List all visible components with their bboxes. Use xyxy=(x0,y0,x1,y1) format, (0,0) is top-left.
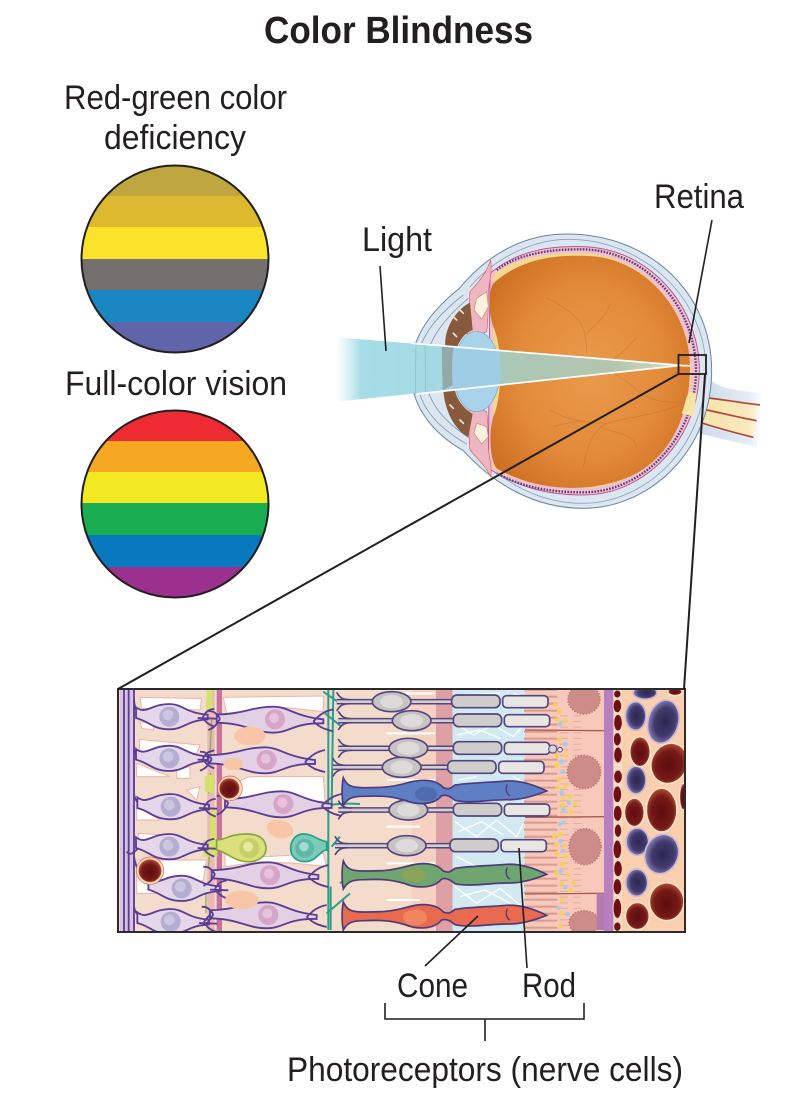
label: Light: Light xyxy=(362,221,433,259)
zoom line left xyxy=(118,374,678,689)
choroid and retina layers xyxy=(488,247,699,495)
peach nuclei xyxy=(223,727,295,909)
cone cell: green xyxy=(342,861,547,889)
circle: full-color vision bands xyxy=(80,409,270,599)
inner retinal layers xyxy=(120,690,360,934)
purple ganglion cells xyxy=(136,704,228,934)
title: Color Blindness xyxy=(264,10,533,52)
nerve fiber bars xyxy=(120,690,138,931)
heading: red-green color deficiency: deficiency xyxy=(104,119,246,157)
eye cross-section xyxy=(337,234,763,508)
arrow: Retina leader line xyxy=(689,220,712,343)
vertical strips xyxy=(202,690,222,931)
bracket xyxy=(385,1003,584,1041)
vitreous body xyxy=(490,256,690,488)
arrow: Rod leader line xyxy=(519,848,527,968)
circle: red-green color deficiency bands xyxy=(80,164,270,354)
teal vertical process xyxy=(323,690,360,930)
label: Photoreceptors: Photoreceptors (nerve cells) xyxy=(287,1051,683,1089)
yellow-green cell xyxy=(217,834,266,862)
teal cell xyxy=(291,834,327,862)
retina cross-section panel xyxy=(118,685,694,935)
pigment epithelium xyxy=(524,685,605,935)
cornea lines xyxy=(416,295,470,444)
zoom line right xyxy=(684,374,705,689)
sclera xyxy=(411,234,712,508)
label: Rod: Rod xyxy=(522,967,576,1005)
capillary zone xyxy=(622,690,685,932)
rod cells xyxy=(333,692,562,856)
purple Bruch band xyxy=(604,690,613,932)
arrow: Cone leader line xyxy=(425,916,478,966)
heading: red-green color deficiency: Red-green color xyxy=(64,79,287,117)
heading: red-green color deficiency xyxy=(64,79,287,157)
capillary chain xyxy=(613,690,622,931)
magnifier box on retina xyxy=(678,355,706,374)
label: Cone: Cone xyxy=(397,967,468,1005)
lens xyxy=(453,332,500,412)
heading: full-color vision: Full-color vision xyxy=(65,365,287,403)
panel frame xyxy=(118,689,685,932)
cone cell: blue xyxy=(342,778,547,806)
cone cell: red xyxy=(342,902,547,930)
outer plexiform band xyxy=(387,690,453,932)
pink bipolar cells xyxy=(200,707,342,928)
outer retinal layers xyxy=(333,685,694,935)
pigment granules xyxy=(552,703,577,928)
blood cells xyxy=(624,690,684,930)
optic disc xyxy=(682,392,697,417)
light-blue matrix xyxy=(453,690,527,932)
red blood cells xyxy=(136,776,242,884)
optic nerve xyxy=(683,377,763,447)
light beam xyxy=(337,337,690,402)
label: Retina: Retina xyxy=(654,178,744,216)
iris xyxy=(443,303,473,437)
arrow: Light leader line xyxy=(380,266,386,351)
retinal blood vessels xyxy=(547,298,685,467)
ciliary body xyxy=(467,260,491,477)
